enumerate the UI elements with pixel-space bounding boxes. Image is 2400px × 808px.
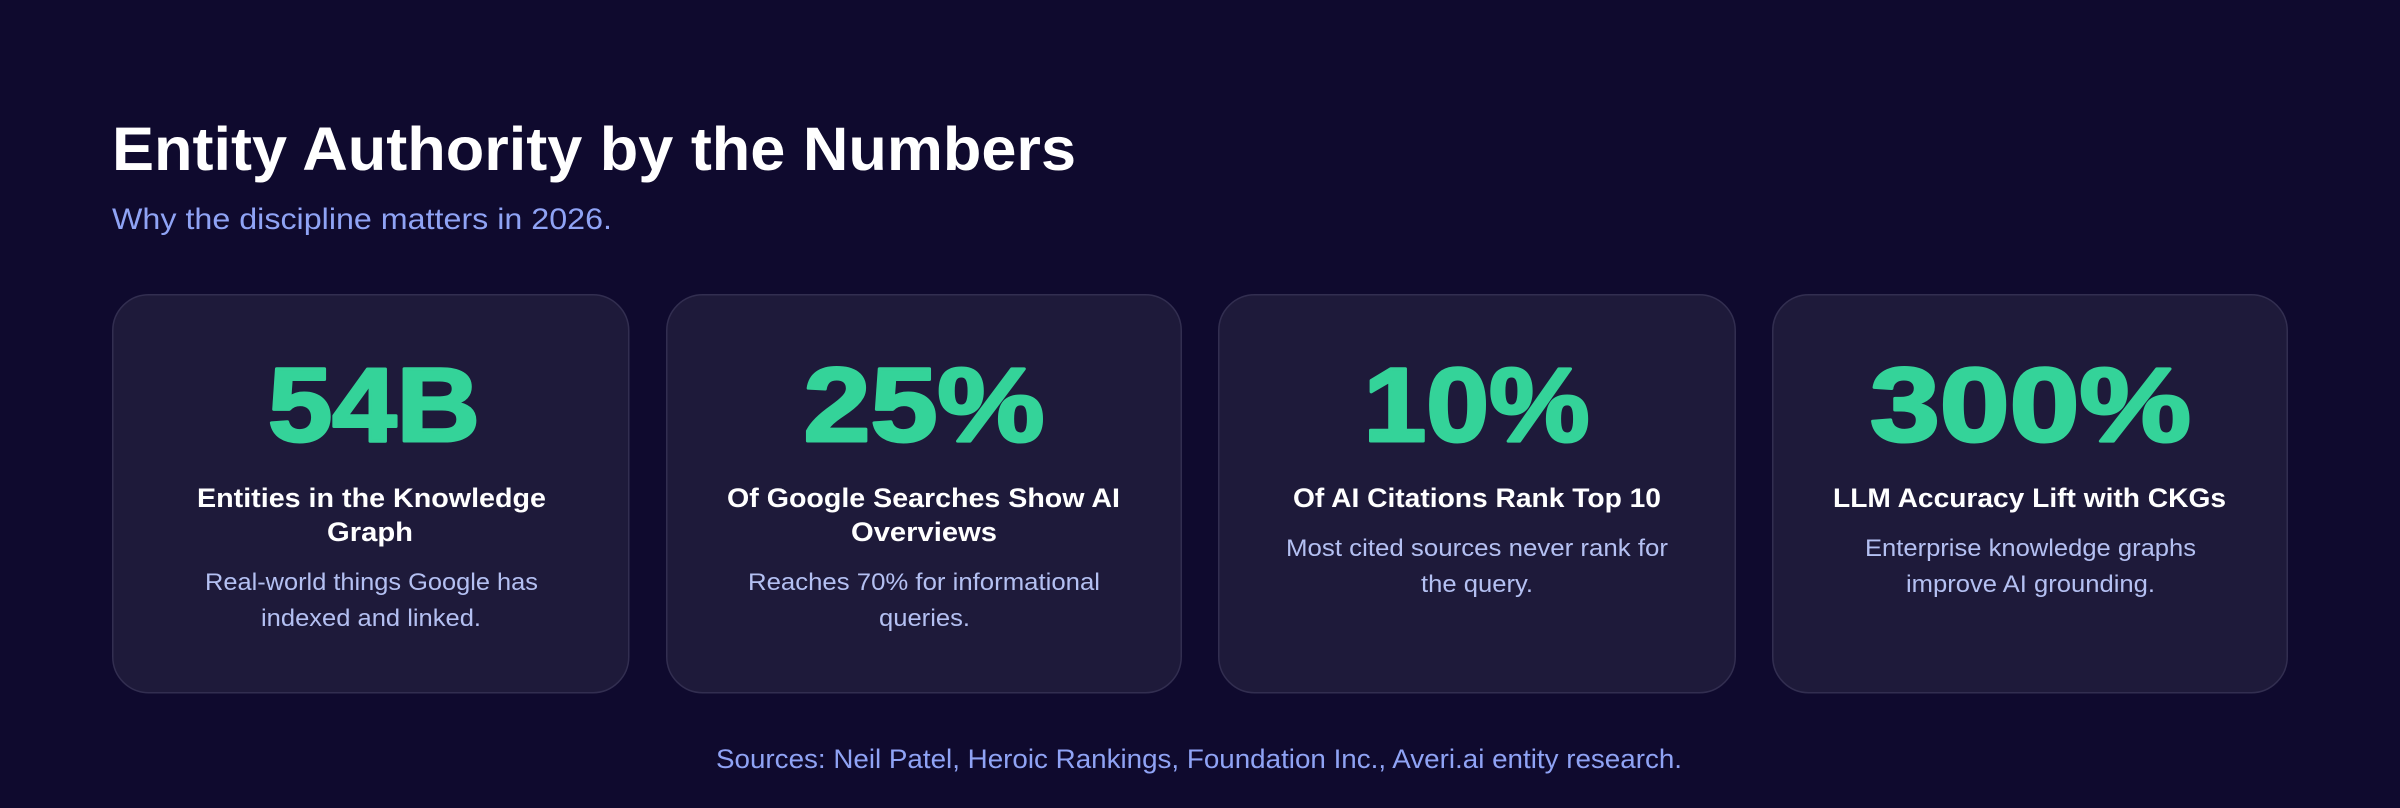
big number: 10%: 10% — [1364, 347, 1590, 464]
description — [1286, 535, 1668, 598]
description: Real-world things Google has — [205, 569, 538, 596]
card background — [1219, 295, 1735, 693]
panel: 300% stat card — [1773, 295, 2287, 693]
description — [205, 569, 538, 632]
big number: 54B: 54B — [268, 347, 480, 464]
card background — [1773, 295, 2287, 693]
card background — [667, 295, 1181, 693]
big number: 300%: 300% — [1870, 347, 2191, 464]
label: entities in the knowledge graph: Graph — [327, 517, 413, 547]
description — [1865, 535, 2196, 598]
label: of ai citations rank top 10: Of AI Citations Rank Top 10 — [1293, 483, 1661, 513]
label: llm accuracy lift with ckgs: LLM Accuracy Lift with CKGs — [1833, 483, 2226, 513]
description: Enterprise knowledge graphs — [1865, 535, 2196, 562]
label: of google searches show ai overviews: Overviews — [851, 517, 997, 547]
description: queries. — [879, 605, 970, 632]
description: improve AI grounding. — [1906, 571, 2155, 598]
label: of google searches show ai overviews: Of Google Searches Show AI — [727, 483, 1120, 513]
panel: 10% stat card — [1219, 295, 1735, 693]
description: Reaches 70% for informational — [748, 569, 1100, 596]
label: entities in the knowledge graph: Entities in the Knowledge — [197, 483, 546, 513]
title: Entity Authority by the Numbers — [112, 115, 1076, 183]
big number: 25%: 25% — [804, 347, 1044, 464]
panel: 54B stat card — [113, 295, 629, 693]
label: of google searches show ai overviews — [727, 483, 1120, 547]
panel: 25% stat card — [667, 295, 1181, 693]
description: indexed and linked. — [261, 605, 481, 632]
description — [748, 569, 1100, 632]
card background — [113, 295, 629, 693]
sources footnote: Sources: Neil Patel, Heroic Rankings, Foundation Inc., Averi.ai entity research. — [716, 744, 1682, 774]
label: entities in the knowledge graph — [197, 483, 546, 547]
description: the query. — [1421, 571, 1533, 598]
description: Most cited sources never rank for — [1286, 535, 1668, 562]
subtitle: Why the discipline matters in 2026. — [112, 203, 612, 236]
